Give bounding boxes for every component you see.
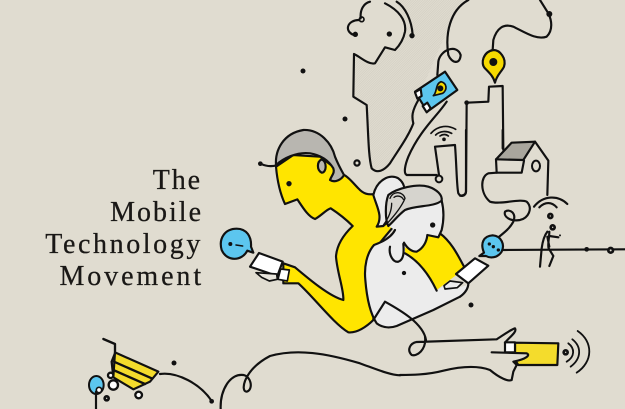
woman hand outline [460, 283, 468, 297]
figure hair loops [348, 2, 413, 35]
man hair [276, 130, 344, 181]
woman eye [430, 222, 435, 228]
hand holding yellow card [400, 328, 589, 380]
ring node [105, 396, 109, 400]
white cuff [505, 342, 515, 352]
man cuff [278, 269, 289, 281]
title: Technology [45, 229, 203, 260]
loose dots [172, 68, 474, 366]
title: Movement [59, 261, 204, 292]
woman fill [365, 186, 468, 328]
title: Mobile [110, 197, 203, 228]
man eye [286, 181, 292, 186]
blue balloon [89, 376, 104, 409]
horizontal line with nodes [503, 247, 625, 253]
house, person and bubble [460, 130, 625, 267]
walking person [540, 225, 561, 267]
blue chat bubble [479, 235, 503, 257]
house [496, 142, 548, 195]
curve end [209, 399, 214, 404]
woman necklace dot [402, 271, 406, 275]
title: The [153, 165, 202, 196]
cart basket [113, 352, 158, 389]
figure outline [353, 3, 418, 171]
whisker line [258, 161, 277, 166]
looping cable [482, 173, 530, 237]
hair knots [353, 17, 415, 38]
woman neck curl [390, 244, 404, 262]
title [45, 165, 204, 292]
bottom loop [221, 352, 400, 409]
woman hair [386, 186, 442, 226]
wifi icon [431, 126, 456, 140]
wifi signal [534, 198, 567, 218]
woman outline [365, 201, 460, 328]
hatched shadow [353, 0, 463, 171]
cable from phone [437, 0, 468, 75]
woman phone [456, 258, 488, 283]
network line with towers [405, 86, 503, 196]
cables [460, 130, 503, 196]
woman hand on phone [444, 281, 463, 289]
network nodes [436, 100, 469, 182]
man ear [318, 159, 326, 173]
man phone [250, 253, 283, 276]
blue phone with pin [415, 72, 457, 112]
man body [276, 155, 393, 332]
shopping cart and cable [89, 339, 400, 409]
hair strands [383, 193, 405, 225]
woman ponytail [373, 177, 404, 227]
yellow location pin [483, 50, 505, 83]
man bubble [221, 229, 253, 259]
two people with phones [221, 130, 488, 340]
man shoulder behind woman [400, 233, 465, 290]
hatched figure holding phone [348, 0, 552, 196]
basket bars [113, 362, 152, 384]
arm outline [400, 328, 528, 380]
cable knot [546, 11, 552, 17]
man hand [256, 273, 277, 281]
contactless signal [564, 331, 589, 373]
man shoulder outline [440, 233, 465, 268]
yellow card [515, 343, 558, 365]
cable from pin [493, 0, 551, 50]
cart wheels [108, 373, 142, 398]
curve from cart [160, 374, 212, 401]
woman arm line [373, 302, 426, 340]
cart handle [103, 339, 115, 377]
arm and fingers [490, 353, 528, 380]
